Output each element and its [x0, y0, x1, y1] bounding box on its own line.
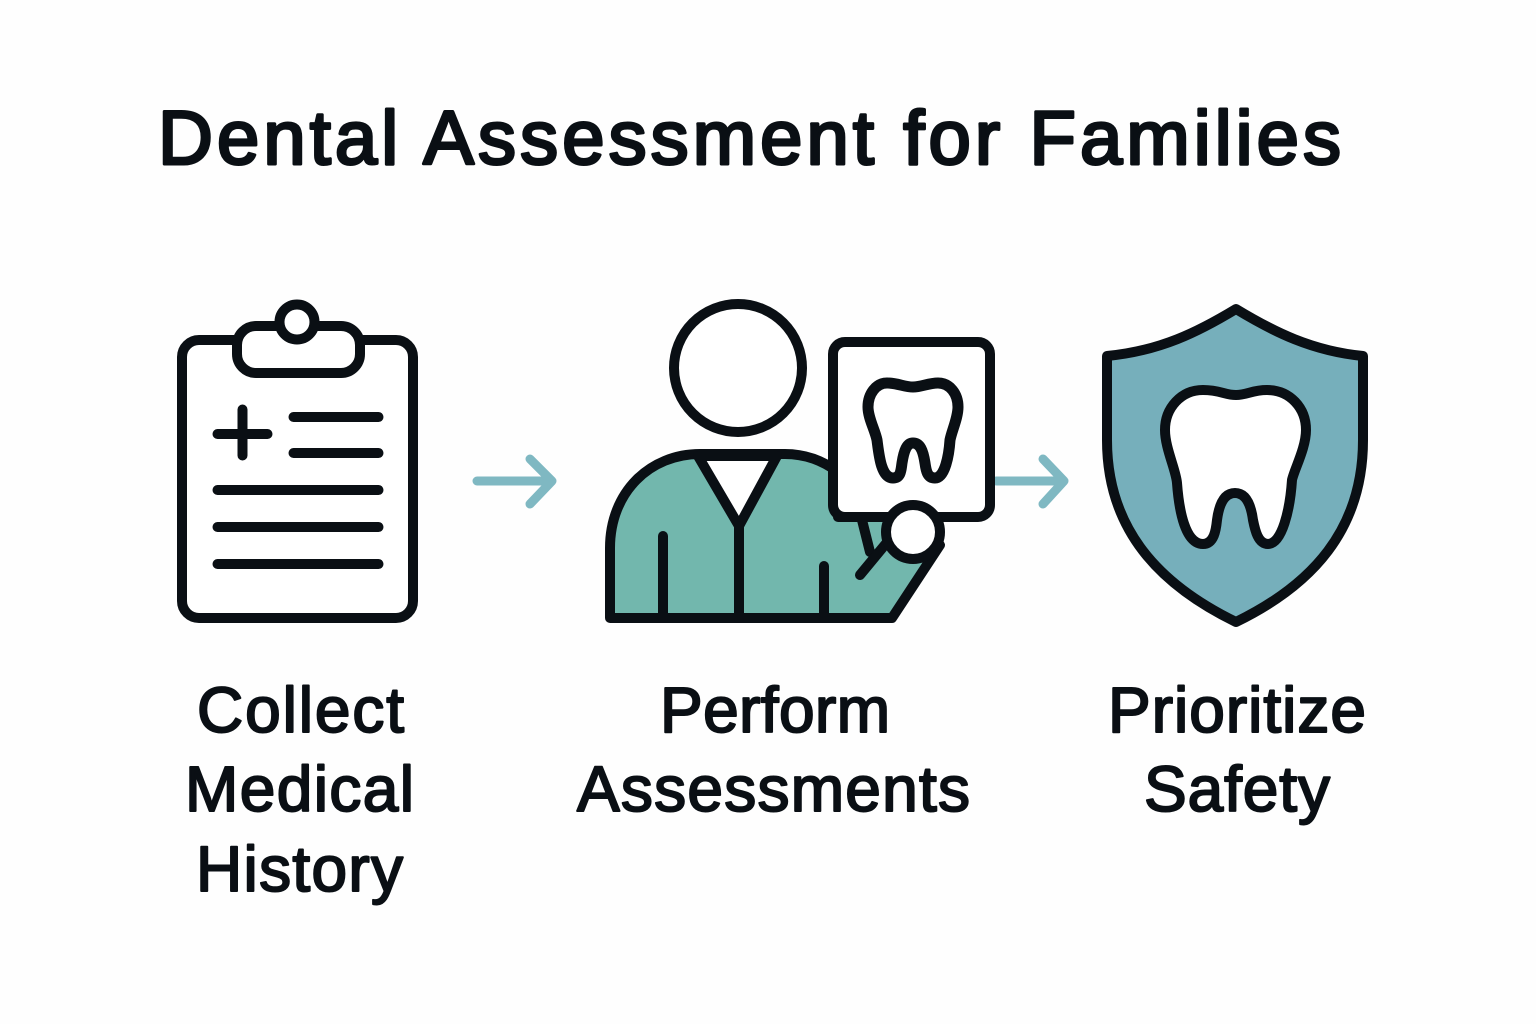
collar	[698, 456, 777, 526]
card tooth	[868, 383, 958, 478]
label: collect medical history	[185, 674, 414, 905]
magnifier	[862, 520, 870, 552]
label: perform assessments	[577, 674, 970, 825]
arrow: second	[996, 459, 1064, 504]
label: prioritize safety	[1108, 674, 1366, 825]
icon: dentist with tooth card	[610, 304, 990, 618]
arrow: first	[477, 459, 552, 504]
icon: clipboard	[182, 304, 413, 618]
label: collect medical history: History	[196, 833, 403, 905]
coat lines	[663, 526, 824, 618]
label: collect medical history: Collect	[197, 674, 404, 746]
label: perform assessments: Assessments	[577, 753, 970, 825]
icon: shield with tooth	[1107, 309, 1363, 622]
label: perform assessments: Perform	[660, 674, 890, 746]
label: prioritize safety: Prioritize	[1108, 674, 1366, 746]
label: prioritize safety: Safety	[1144, 753, 1330, 825]
body	[610, 454, 940, 618]
head	[674, 304, 802, 432]
tooth card	[833, 342, 990, 517]
label: collect medical history: Medical	[185, 753, 414, 825]
title: Dental Assessment for Families	[158, 96, 1341, 181]
